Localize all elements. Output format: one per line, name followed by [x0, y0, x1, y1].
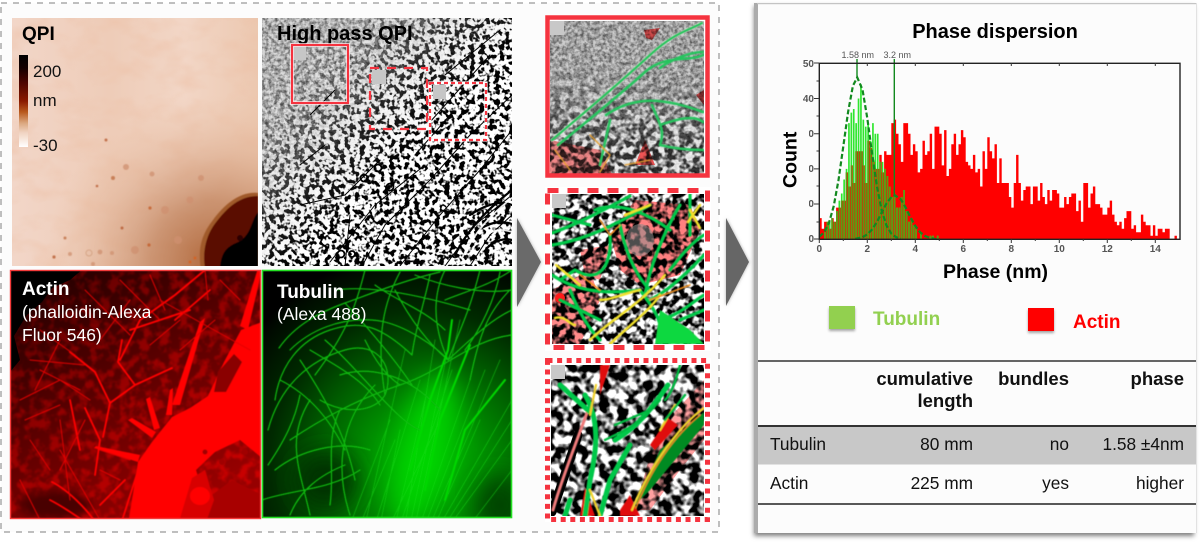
table row: tubulin: Tubulin	[770, 434, 826, 454]
inset image texture	[550, 21, 704, 174]
x axis numbers	[817, 244, 1161, 255]
legend: actin	[1028, 308, 1120, 333]
tubulin histogram bars	[824, 84, 939, 239]
heading: Actin with stain label: Fluor 546)	[22, 325, 102, 345]
gaussian fit: 3.2 nm	[855, 195, 939, 239]
heading: Actin with stain label	[22, 279, 152, 345]
x axis numbers: 6	[961, 244, 967, 255]
small vesicle spots	[52, 138, 204, 266]
legend: actin: Actin	[1073, 312, 1120, 333]
inset image texture	[552, 194, 704, 344]
table header row	[876, 368, 1184, 411]
table row: actin	[770, 473, 1184, 493]
heading: Tubulin with stain label	[277, 282, 366, 324]
y axis numbers: 40	[803, 94, 814, 105]
heading: Actin with stain label: (phalloidin-Alexa	[22, 302, 152, 322]
heading: Tubulin with stain label: Tubulin	[277, 282, 344, 303]
actin image border	[10, 270, 260, 518]
y axis numbers: 10	[803, 199, 814, 210]
heading: High pass QPI: High pass QPI	[277, 23, 413, 45]
table row: actin: Actin	[770, 473, 808, 493]
y axis title: Count	[780, 131, 802, 188]
axis tick marks	[814, 63, 1155, 243]
table row: tubulin: no	[1050, 434, 1069, 454]
table row: tubulin: 80 mm	[920, 434, 973, 454]
legend: tubulin: Tubulin	[873, 309, 940, 330]
heading: Actin with stain label: Actin	[22, 279, 70, 300]
colour scale bar: nm	[33, 91, 57, 110]
x axis numbers: 4	[913, 244, 919, 255]
panel: tubulin fluorescence image	[263, 271, 511, 517]
peak labels	[842, 50, 911, 60]
x axis numbers: 0	[817, 244, 823, 255]
legend: tubulin	[829, 306, 940, 330]
peak marker lines	[857, 59, 894, 196]
inset image texture	[551, 365, 704, 516]
region marker: solid box	[292, 45, 348, 103]
panel: high pass QPI image	[262, 18, 512, 266]
gaussian fit: 1.58 nm	[819, 77, 901, 239]
filament streaks	[300, 30, 512, 266]
panel: microscopy images dashed frame	[1, 3, 719, 532]
actin filaments	[50, 270, 210, 527]
panel: actin fluorescence image	[10, 268, 262, 527]
microtubule fan	[350, 320, 512, 525]
colour scale bar	[19, 55, 61, 155]
arrow: images to insets	[517, 218, 541, 307]
y axis numbers	[803, 59, 814, 245]
table row: tubulin	[758, 427, 1196, 464]
table header row: phase	[1131, 368, 1184, 389]
x axis numbers: 2	[865, 244, 871, 255]
y axis numbers: 20	[803, 164, 814, 175]
panel: phase dispersion analysis	[754, 3, 1197, 533]
table row: actin: 225 mm	[911, 473, 973, 493]
arrow: insets to analysis	[726, 218, 749, 306]
chart title: Phase dispersion	[912, 21, 1078, 43]
comparison table	[758, 361, 1196, 504]
table header row: cumulative	[876, 368, 973, 389]
table header row: length	[918, 390, 973, 411]
x axis numbers: 8	[1009, 244, 1015, 255]
axes frame	[819, 63, 1180, 239]
panel: inset dashed frame	[545, 187, 711, 351]
panel: inset solid frame overlay	[545, 15, 710, 178]
heading: QPI: QPI	[22, 24, 55, 45]
x axis numbers: 14	[1150, 244, 1161, 255]
microtubule filaments	[262, 270, 512, 515]
histogram chart: phase dispersion	[780, 50, 1180, 283]
actin spikes	[94, 268, 262, 462]
panel: inset dotted frame	[545, 358, 711, 522]
x axis numbers: 12	[1102, 244, 1113, 255]
bright actin bundle mass	[20, 268, 262, 527]
icon: dark cell nucleus region	[200, 193, 258, 268]
heading: Tubulin with stain label: (Alexa 488)	[277, 304, 366, 324]
table row: actin: yes	[1042, 473, 1069, 493]
table row: actin: higher	[1136, 473, 1184, 493]
x axis title: Phase (nm)	[943, 261, 1048, 283]
colour scale bar: 200	[33, 62, 61, 81]
y axis numbers: 0	[808, 234, 814, 245]
actin histogram bars	[819, 120, 1177, 239]
colour scale bar: -30	[33, 136, 58, 155]
region marker: dotted box	[430, 83, 486, 140]
peak labels: 3.2 nm	[884, 50, 911, 60]
peak labels: 1.58 nm	[842, 50, 874, 60]
table header row: bundles	[998, 368, 1069, 389]
y axis numbers: 50	[803, 59, 814, 70]
tubulin image border	[262, 270, 512, 518]
region marker: dashed box	[370, 68, 427, 129]
x axis numbers: 10	[1054, 244, 1065, 255]
y axis numbers: 30	[803, 129, 814, 140]
panel: QPI image	[12, 18, 258, 268]
tubulin and actin overlap	[824, 140, 939, 239]
table row: tubulin: 1.58 ±4nm	[1102, 434, 1184, 454]
